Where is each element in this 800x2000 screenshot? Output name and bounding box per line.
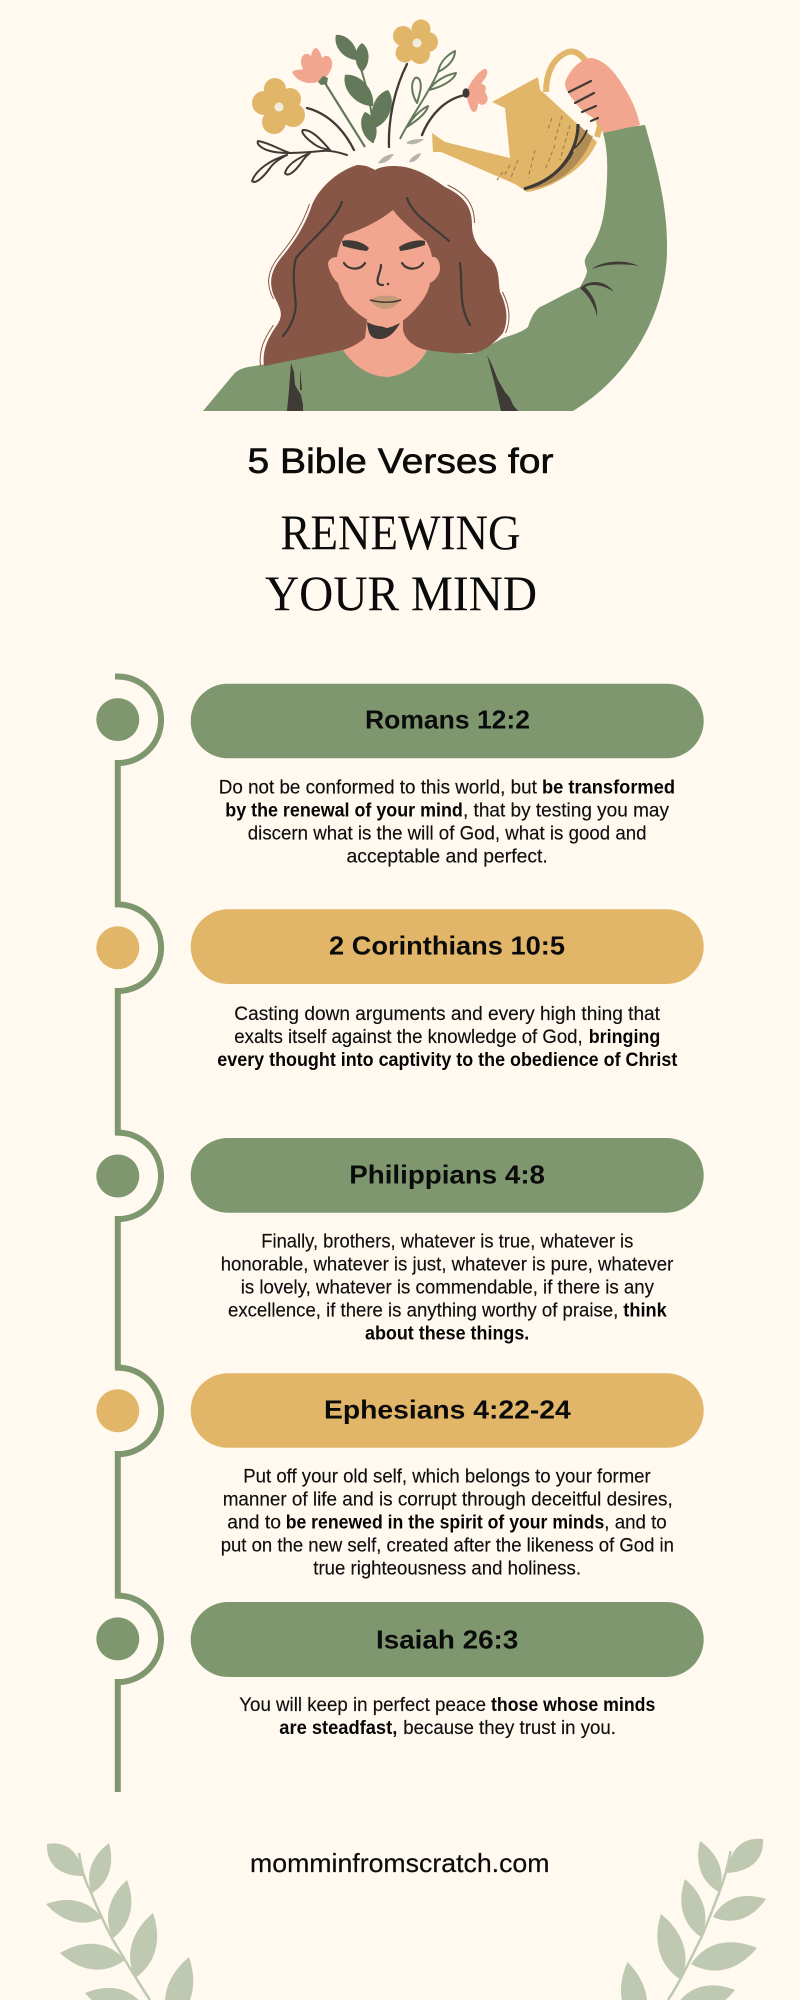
timeline node bbox=[96, 1154, 139, 1198]
shirt shading strokes bbox=[287, 262, 639, 411]
neck bbox=[343, 315, 427, 377]
timeline connector bbox=[115, 676, 161, 1792]
verse text: Put off your old self, which belongs to your former bbox=[243, 1466, 651, 1488]
lips bbox=[370, 296, 401, 309]
title: Renewing Your Mind: RENEWING bbox=[280, 504, 520, 560]
verse text: every thought into captivity to the obedience of Christ bbox=[217, 1050, 678, 1071]
icon: top yellow flower bbox=[393, 20, 438, 64]
face bbox=[328, 210, 440, 328]
verse text bbox=[221, 1232, 674, 1344]
verse text bbox=[217, 1004, 678, 1071]
panel: Philippians 4:8 bbox=[96, 1138, 704, 1344]
verse text: honorable, whatever is just, whatever is pure, whatever bbox=[221, 1254, 674, 1276]
verse text: and to bbox=[227, 1512, 281, 1534]
verse text: those whose minds bbox=[491, 1695, 655, 1716]
verse text: excellence, if there is anything worthy of praise, bbox=[228, 1300, 618, 1322]
icon: water droplets bbox=[378, 139, 424, 163]
verse text bbox=[221, 1466, 674, 1580]
panel: Isaiah 26:3 bbox=[96, 1602, 704, 1739]
verse text: discern what is the will of God, what is good and bbox=[248, 824, 647, 844]
verse text: Do not be conformed to this world, but bbox=[219, 778, 538, 798]
verse reference: Romans 12:2 bbox=[365, 704, 530, 734]
heading pill bbox=[191, 1602, 704, 1677]
panel: 2 Corinthians 10:5 bbox=[96, 909, 704, 1071]
verse text: by the renewal of your mind bbox=[225, 800, 463, 822]
title: Renewing Your Mind: YOUR MIND bbox=[265, 565, 537, 621]
heading: 5 Bible Verses for: 5 Bible Verses for bbox=[248, 442, 554, 481]
verse reference: Isaiah 26:3 bbox=[376, 1624, 518, 1654]
timeline node bbox=[96, 1389, 139, 1432]
verse text bbox=[239, 1695, 655, 1739]
hand with finger lines bbox=[565, 58, 640, 133]
illustration: woman watering flowers growing from her head bbox=[203, 20, 667, 411]
hair bbox=[260, 165, 509, 366]
verse text: acceptable and perfect. bbox=[346, 846, 548, 868]
icon: dark stems and outlined leaves bbox=[252, 64, 407, 182]
verse text: be transformed bbox=[542, 778, 675, 798]
verse reference: Ephesians 4:22-24 bbox=[324, 1394, 571, 1424]
panel: Romans 12:2 bbox=[96, 684, 704, 868]
panel: Ephesians 4:22-24 bbox=[96, 1373, 704, 1580]
verse text: exalts itself against the knowledge of God, bbox=[234, 1027, 583, 1048]
verse text: Casting down arguments and every high thing that bbox=[234, 1004, 661, 1025]
title: Renewing Your Mind bbox=[265, 504, 537, 621]
verse text: , and to bbox=[604, 1512, 667, 1534]
timeline node bbox=[96, 698, 139, 741]
heading pill bbox=[191, 684, 704, 758]
shirt and raised arm bbox=[203, 125, 667, 411]
verse text: about these things. bbox=[365, 1324, 529, 1344]
verse text: because they trust in you. bbox=[403, 1718, 616, 1739]
icon: outlined green sprig bbox=[400, 51, 456, 139]
icon: central leafy sprig bbox=[330, 30, 397, 145]
icon: left pink flower bbox=[292, 48, 365, 147]
icon: watering can bbox=[432, 51, 600, 192]
decoration: right leaf branch bbox=[615, 1831, 771, 2000]
verse text: be renewed in the spirit of your minds bbox=[286, 1512, 604, 1534]
verse text: manner of life and is corrupt through deceitful desires, bbox=[223, 1490, 673, 1510]
verse text: You will keep in perfect peace bbox=[239, 1695, 486, 1716]
verse text: are steadfast, bbox=[279, 1718, 397, 1739]
nose bbox=[378, 265, 383, 285]
verse text bbox=[219, 778, 675, 868]
heading pill bbox=[191, 1373, 704, 1448]
icon: left yellow flower bbox=[252, 78, 305, 134]
verse reference: 2 Corinthians 10:5 bbox=[329, 930, 565, 960]
website footer: momminfromscratch.com bbox=[250, 1848, 550, 1878]
heading pill bbox=[191, 1138, 704, 1213]
verse text: put on the new self, created after the likeness of God in bbox=[221, 1536, 674, 1556]
timeline node bbox=[96, 926, 139, 969]
verse text: Finally, brothers, whatever is true, whatever is bbox=[261, 1232, 633, 1252]
closed eyes bbox=[344, 263, 423, 269]
timeline node bbox=[96, 1617, 139, 1660]
verse text: , that by testing you may bbox=[463, 800, 669, 822]
verse text: think bbox=[623, 1300, 667, 1322]
verse text: bringing bbox=[589, 1027, 660, 1048]
decoration: left leaf branch bbox=[39, 1835, 201, 2000]
icon: right pink flower on dark stem bbox=[422, 69, 488, 135]
verse text: true righteousness and holiness. bbox=[313, 1558, 581, 1580]
verse reference: Philippians 4:8 bbox=[349, 1160, 545, 1190]
eyebrows bbox=[342, 240, 425, 251]
verse text: is lovely, whatever is commendable, if there is any bbox=[241, 1278, 654, 1298]
heading pill bbox=[191, 909, 704, 984]
